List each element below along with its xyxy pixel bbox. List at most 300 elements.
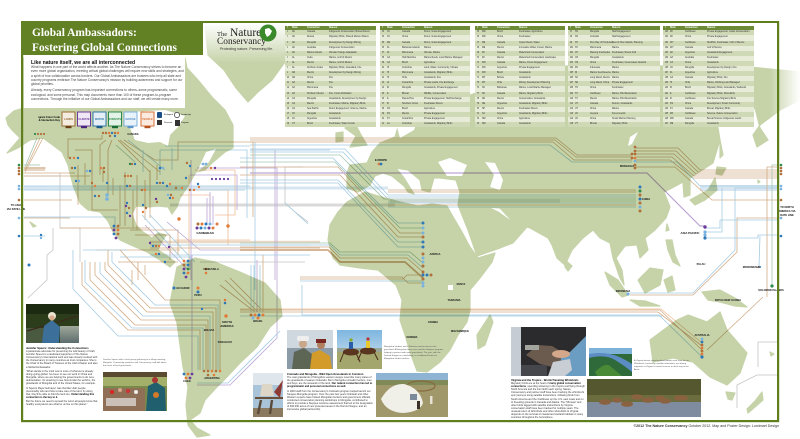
table 4: 98	[570, 36, 572, 38]
table 1: CA	[292, 108, 295, 110]
table 2: Chile	[402, 77, 407, 79]
table 2: Grasslands, Private Engagement	[424, 87, 458, 89]
photo: tagged whimbrel in hand	[511, 327, 586, 376]
table 5: 144	[664, 108, 668, 110]
table 1: 19	[286, 123, 289, 125]
table 2: KY	[387, 118, 390, 120]
table 2: State	[387, 27, 393, 29]
table 2: Brazil	[402, 108, 408, 110]
legend title: & Interaction Key	[39, 118, 61, 122]
table 2: IA	[387, 82, 389, 84]
map labels: CANADA	[127, 132, 139, 136]
table 1: 14	[286, 98, 289, 100]
table 5: Mongolia	[685, 67, 694, 69]
table 2: Donor, Grass Engagement	[424, 31, 451, 33]
table 2: HI	[387, 77, 389, 79]
table 3: Watershed Conservation	[519, 52, 544, 54]
table 2: Canada	[402, 42, 410, 44]
table 5: 145	[664, 113, 668, 115]
table 1: Grasslands, Development by Design	[329, 98, 366, 100]
table 2: FL	[387, 52, 390, 54]
table 4: TN	[575, 87, 578, 89]
table 5: China	[685, 62, 691, 64]
table 3: Grasslands	[519, 72, 531, 74]
table 5: Brazil	[685, 87, 691, 89]
routes: South America and Australia	[73, 250, 778, 408]
nodes: Colombia region	[183, 260, 207, 278]
logo tagline: Protecting nature. Preserving life.	[220, 47, 273, 51]
table 2: Costa Rica	[402, 118, 413, 120]
table 5: Freshwater	[707, 57, 718, 59]
legend: program colour code and interaction key	[38, 112, 192, 128]
table 2: KS	[387, 108, 390, 110]
table 4: Marine	[612, 67, 619, 69]
table 1: AL	[292, 62, 295, 64]
table 1: CT	[292, 123, 295, 125]
table 1: Mongolia	[307, 113, 316, 115]
nodes: Mexico	[113, 225, 119, 239]
table 4: Freshwater, Rivers Fish	[612, 52, 636, 54]
table 3: 71	[476, 62, 479, 64]
table 4: OK	[575, 57, 578, 59]
table 5: China	[685, 36, 691, 38]
table 4: 103	[570, 62, 573, 64]
photo: group meeting in pavilion	[103, 372, 167, 411]
table 3: NC	[482, 87, 485, 89]
photo: man with pack	[253, 373, 283, 417]
legend: interaction icons: Leadership	[181, 114, 192, 116]
table 1: Russia	[307, 36, 314, 38]
legend: interaction icons: Ecological	[164, 114, 174, 116]
table 2: Private Engagement	[424, 118, 445, 120]
table 4: State	[575, 27, 581, 29]
pale wide route bands	[24, 150, 778, 242]
table 4: Best of Nine Islands, Planning	[612, 42, 643, 44]
table 1: Migratory Birds, Grassland, Fire	[329, 67, 361, 69]
table 1: 18	[286, 118, 289, 120]
table 2: 41	[382, 72, 384, 74]
table 2: 37	[382, 52, 384, 54]
table 2: 33	[382, 31, 384, 33]
nodes: Asia Pacific	[626, 225, 774, 296]
table 4: Mekong Freshwater	[590, 52, 610, 54]
table 1: CO	[292, 118, 295, 120]
table 1: 15	[286, 103, 289, 105]
table 3: #	[476, 27, 478, 29]
photo: paddler on river	[26, 304, 79, 343]
table 1: Mexico	[307, 72, 314, 74]
table 4: 104	[570, 67, 573, 69]
table 4: OR	[575, 62, 578, 64]
table 4: 111	[570, 103, 573, 105]
map labels: SOUTH	[222, 320, 232, 324]
table 4: Marine, Bird Restoration	[612, 93, 637, 95]
text block: Colorado and Mongolia: Colorado and Mongolia - Wild Open Grasslands in Common	[287, 372, 363, 376]
table 3: Canada	[497, 62, 505, 64]
table 3: NH	[482, 108, 485, 110]
table 1: Mexico	[307, 62, 314, 64]
caption: wetlands and whimbrels: A Virginia barrier island wetland habitat seen from the air. Whimbrels, tracked by satellite transmitter, rest during migration at Virginia's coastal reserve on their way to the Arctic.	[634, 360, 689, 370]
map labels	[7, 132, 796, 383]
table 5: Canada	[685, 118, 693, 120]
map labels: CHINA	[642, 197, 650, 201]
table 3: MO	[482, 67, 486, 69]
table 3: MS	[482, 77, 485, 79]
table 1: AK	[292, 47, 295, 49]
table 4: Mongolia	[590, 31, 599, 33]
table 3: Grasslands, Migratory Birds	[519, 113, 547, 115]
table 2: Connection	[402, 27, 415, 29]
table 2: 49	[382, 113, 384, 115]
table 5: Migratory Birds, Fire	[707, 77, 728, 79]
table 3: Brazil	[497, 72, 503, 74]
table 4: Donors, Grasslands	[612, 103, 632, 105]
table 1: Marine Islands	[307, 52, 322, 54]
table 4: NV	[575, 36, 578, 38]
table 1	[285, 26, 376, 127]
logo: The Nature Conservancy: Conservancy	[217, 37, 266, 47]
table 5: Shellfish, Freshwater, Gulf of Mexico	[707, 42, 744, 44]
table 5: 142	[664, 98, 668, 100]
table 1: Mongolia	[307, 98, 316, 100]
table 1: Connection	[307, 27, 320, 29]
table 2: Micronesia	[402, 52, 413, 54]
table 5: CA	[670, 62, 673, 64]
land: South America	[170, 258, 282, 437]
caption: group photo: Jennifer Speers with a local group gathering at a village meeting, Mongolia. Community members and Conservancy staff talk about the future of local grasslands.	[103, 359, 166, 367]
land: Greenland	[205, 26, 285, 102]
legend: interaction icons	[157, 112, 192, 126]
table 3: 69	[476, 52, 479, 54]
table 3: Private Engagement	[519, 67, 540, 69]
table 5: Mongolia	[685, 123, 694, 125]
table 4: VT	[575, 123, 578, 125]
table 1: Freshwater, Water Funds	[329, 123, 355, 125]
table 3: MT	[482, 82, 485, 84]
table 5: Canada	[685, 47, 693, 49]
table 5: 130	[664, 36, 668, 38]
table 3: Bahamas	[497, 87, 507, 89]
table 2: 34	[382, 36, 384, 38]
table 5: IN	[670, 98, 672, 100]
table 5: Agriculture	[707, 72, 718, 74]
table 3: Mexico	[497, 108, 504, 110]
map labels: VIA DATE LINE	[7, 207, 25, 211]
text block: Jennifer Speers: Jennifer Speers: Understanding the Connections	[26, 346, 89, 350]
table 4: Indonesia	[590, 67, 600, 69]
photo: Colorado and Mongolian ranchers	[287, 330, 333, 369]
table 1: CA	[292, 103, 295, 105]
table 3: NM	[482, 123, 486, 125]
legend: interaction icons: Personal	[164, 122, 172, 124]
table 2: Brazil	[402, 62, 408, 64]
map labels: TO NORTH	[780, 205, 794, 209]
intro panel	[24, 55, 185, 108]
table 2: IL	[387, 98, 389, 100]
nodes: Africa	[422, 222, 432, 288]
logo globe	[260, 24, 276, 42]
text block: Colorado and Mongolia	[287, 372, 373, 411]
table 1: AZ	[292, 93, 295, 95]
table 1: Northern Mexico	[307, 93, 324, 95]
table 3: NC	[482, 93, 485, 95]
table 1: CO	[292, 113, 295, 115]
table 5: Connection	[685, 27, 698, 29]
table 3: Mexico	[497, 98, 504, 100]
table 3: 65	[476, 31, 479, 33]
table 2: Grasslands, Migratory Birds	[424, 123, 452, 125]
legend: marine: MARINE	[125, 117, 136, 121]
table 1: 10	[286, 77, 289, 79]
table 5: 146	[664, 118, 668, 120]
table 5: Marine, Working Land Managed	[707, 82, 740, 84]
table 3	[475, 26, 565, 127]
table 5: 140	[664, 87, 668, 89]
table 3: NJ	[482, 113, 485, 115]
table 1: Mexico	[307, 82, 314, 84]
nodes: Central America	[149, 242, 170, 263]
table 5: WI	[670, 31, 673, 33]
photo: whimbrels at shoreline	[587, 379, 701, 417]
table 5: FL	[670, 72, 673, 74]
table 2: Climate, Marine	[424, 52, 440, 54]
table 3: Argentina	[497, 113, 507, 115]
table 4: #	[570, 27, 571, 29]
table 1: AK	[292, 52, 295, 54]
table 2: Bhutan	[402, 93, 409, 95]
table 3: Innovative Water, Forest, Marine	[519, 47, 552, 49]
table 4: Marine, Bird Restoration	[612, 98, 637, 100]
table 3: Freshwater	[519, 36, 530, 38]
table 1: 5	[286, 52, 288, 54]
table 5: GA	[670, 77, 673, 79]
table 1: Grasslands	[329, 113, 341, 115]
legend: interaction icons: Program	[181, 122, 189, 124]
nodes: South America	[172, 286, 264, 379]
land fades behind logo and at right edge	[203, 23, 800, 140]
footer credit: ©2012 The Nature Conservancy October 2012. Map and Poster Design: Lumimart Design	[634, 424, 779, 428]
photo: wetland aerial view	[589, 348, 632, 376]
map labels: KENYA	[457, 282, 466, 286]
table 3: ME	[482, 42, 485, 44]
table 1: AL	[292, 67, 295, 69]
land: Australia	[650, 312, 747, 385]
table 1: 11	[286, 82, 289, 84]
table 5: Science, Nature Conservation	[707, 113, 738, 115]
table 2: Donor, Grass Engagement	[424, 42, 451, 44]
nodes: China	[638, 186, 642, 212]
table 4: Marine	[612, 108, 619, 110]
table 1: State	[292, 27, 298, 29]
table 2: Haiti Maritime	[402, 57, 416, 59]
intro heading: Like nature itself, we are all interconnected	[31, 60, 135, 66]
table 4: Micronesia	[590, 47, 601, 49]
text block: Jennifer Speers: In Tejeros Maya Gulmaya I was that like Utah people, presumably who and how to take care of the land, by doing that, they'll be able to hold the land too. Understanding this connection is the key to it.	[26, 387, 94, 399]
table 5: Migratory Birds, Shorebirds	[707, 93, 735, 95]
table 3: Chile	[497, 82, 502, 84]
routes: North America network	[24, 135, 320, 298]
land: North America	[6, 58, 233, 267]
table 1: 16	[286, 108, 289, 110]
table 1: Donor Engagement, Science, Marine	[329, 108, 367, 110]
map labels: INDONESIA	[616, 289, 630, 293]
table 2: 46	[382, 98, 384, 100]
text block: Jennifer Speers	[26, 346, 98, 406]
map labels: VENEZUELA	[203, 267, 219, 271]
table 2: Agriculture	[424, 62, 435, 64]
table 2: Southern Cross	[402, 103, 418, 105]
table 3: Canada	[497, 123, 505, 125]
table 4	[568, 26, 660, 127]
table 4: OH	[575, 52, 578, 54]
table 4: Bhutan	[590, 123, 597, 125]
table 2: Donor, Grass Engagement	[424, 36, 451, 38]
table 5: Chile	[685, 82, 690, 84]
nodes: Europe	[378, 163, 382, 165]
table 2: Marine Reefs, Local Marine Managed	[424, 57, 462, 59]
table 4: Forest Lands	[612, 113, 625, 115]
table 4: Caribbean	[590, 93, 601, 95]
table 5: 137	[664, 72, 668, 74]
table 1: 9	[286, 72, 288, 74]
table 1: Northern Andes	[307, 67, 323, 69]
table 2: 39	[382, 62, 384, 64]
table 4: 101	[570, 52, 573, 54]
table 4: Smart Marine Planning	[612, 118, 635, 120]
nodes: Caribbean	[177, 217, 230, 230]
intro body text: Already, every Conservancy program has important connections to others–some programmatic, some ecological, and some personal. This map documents more than 100 of these program-to-program connections. Through the initiative of our Global Ambassadors and our staff, we will create many more.	[31, 88, 179, 101]
text block: Jennifer Speers: "What stands in the mind now is more of what we're already doing–going global. I've been to see our work in China and Mongolia, where we are helping the governments to do zero-deforestation. It's amazing to see how similar the world is, the grasslands of Mongolia and of the United States, for example.	[26, 370, 96, 385]
table 4: Colorado	[590, 36, 599, 38]
table 2: 42	[382, 77, 384, 79]
table 3: ND	[482, 98, 485, 100]
table 4: 99	[570, 42, 572, 44]
table 2: #	[382, 27, 383, 29]
table 4: 109	[570, 93, 573, 95]
table 4: Reason	[612, 27, 620, 29]
table 3: 83	[476, 123, 479, 125]
table 4: VA	[575, 118, 578, 120]
table 1: 7	[286, 62, 288, 64]
table 3: Watershed Conservation Landscape	[519, 57, 556, 59]
map labels: TO ASIA	[11, 203, 21, 207]
map labels: AUSTRALIA	[694, 333, 710, 337]
table 3: Reason	[519, 27, 527, 29]
table 2: Reason	[424, 27, 432, 29]
table 5: Argentina	[685, 72, 695, 74]
table 5: 139	[664, 82, 668, 84]
title banner: Fostering Global Connections	[32, 42, 177, 54]
table 2: Mongolia	[402, 87, 411, 89]
table 2: GA	[387, 57, 390, 59]
table 2: Costa Rica	[402, 82, 413, 84]
text block: Colorado and Mongolia: In 2003 staff from the Conservancy's Colorado program helped launch our Steppes Mongolia program. Over the past few years Colorado and other Western experts have hosted Mongolian herders and government officials, conducted conservation planning workshops in Mongolia, contributed to efforts to provide a Steppes resource assessment that led to the designation of 400,000 acres of new protected areas in the Dornod Steppe, and an impressive global partnership.	[287, 390, 373, 411]
map labels: PERU	[194, 293, 202, 297]
map labels: MOZAMBIQUE	[451, 329, 469, 333]
table 4: Connection	[590, 27, 603, 29]
table 4: Grasslands	[612, 57, 624, 59]
table 5: Canada	[685, 108, 693, 110]
table 2: 47	[382, 103, 384, 105]
table 1: #	[286, 27, 288, 29]
map labels: MICRONESIA	[743, 265, 759, 269]
table 5: Caribbean	[685, 98, 696, 100]
table 4: Mexico	[590, 98, 597, 100]
table 5: Boreal Science Indigenous Lands	[707, 118, 741, 120]
legend: water: WATER	[95, 117, 104, 121]
table 5: ME	[670, 123, 673, 125]
table 1: Brazil	[307, 123, 313, 125]
table 1: AK	[292, 36, 295, 38]
photo: Mongolian horse racers	[337, 330, 382, 369]
table 5: 129	[664, 31, 668, 33]
table 1: 13	[286, 93, 289, 95]
map labels: CHILE	[183, 379, 191, 383]
table 5: Development by Design, Fire	[707, 67, 737, 69]
table 5: Grasslands Engagement	[707, 52, 732, 54]
table 1: 3	[286, 42, 288, 44]
table 3: Freshwater Rivers	[519, 108, 538, 110]
table 5: Grasslands	[707, 62, 719, 64]
table 3: Marine, Migratory Birds	[519, 93, 543, 95]
table 4: Migratory Birds	[612, 123, 627, 125]
table 5	[663, 26, 754, 127]
table 4: TX	[575, 98, 578, 100]
table 4: TX	[575, 93, 578, 95]
table 5: HI	[670, 82, 672, 84]
table 1: Mongolia	[307, 42, 316, 44]
table 4: 110	[570, 98, 573, 100]
table 2: 40	[382, 67, 384, 69]
intro body text: What happens in one part of the world affects another. As The Nature Conservancy strives to become an even more global organization, meeting critical global challenges will require new skills and strategies, and a spirit of true collaboration across borders. Our Global Ambassadors are trustees who help all state and country programs embrace The Nature Conservancy's mission by building awareness and support for our global priorities.	[31, 65, 184, 86]
table 4: 102	[570, 57, 573, 59]
table 5: AK	[670, 52, 673, 54]
table 3: Grasslands, Migratory Birds	[519, 103, 547, 105]
table 3: Marine, Donor Engagement	[519, 62, 547, 64]
table 5: KY	[670, 108, 673, 110]
table 5: Argentina	[685, 52, 695, 54]
nodes: Australia	[700, 338, 704, 359]
land: Africa	[328, 192, 495, 372]
table 5: Caribbean	[685, 93, 696, 95]
table 3: MD	[482, 36, 486, 38]
table 2: ID	[387, 87, 389, 89]
table 3: Brazil	[497, 31, 503, 33]
program nodes	[18, 132, 782, 379]
table 4: Mongolia	[590, 57, 599, 59]
text block: Jennifer Speers: But the future we need to spread the word–all people know that healthy ecosystems are what let us live on this planet."	[26, 400, 97, 406]
table 5: MD	[670, 118, 674, 120]
table 4: 114	[570, 118, 573, 120]
routes: connection lines between programs	[24, 135, 778, 408]
table 4: Staff Engagement	[612, 36, 630, 38]
table 2: 36	[382, 47, 384, 49]
table 3: 76	[476, 87, 479, 89]
inland seas and bays	[130, 110, 638, 290]
table 3: ME	[482, 47, 485, 49]
nodes: Hawaii and Pacific	[28, 234, 42, 266]
table 5: State	[670, 27, 676, 29]
table 2: IN	[387, 103, 389, 105]
table 4: Staff Engagement	[612, 31, 630, 33]
table 5: Development, Smart Community	[707, 103, 740, 105]
map labels: CARIBBEAN	[196, 231, 214, 235]
table 4: 97	[570, 31, 572, 33]
table 4: NY	[575, 47, 578, 49]
table 4: China	[590, 108, 596, 110]
table 5: ID	[670, 87, 672, 89]
map labels: AFRICA	[430, 252, 441, 256]
